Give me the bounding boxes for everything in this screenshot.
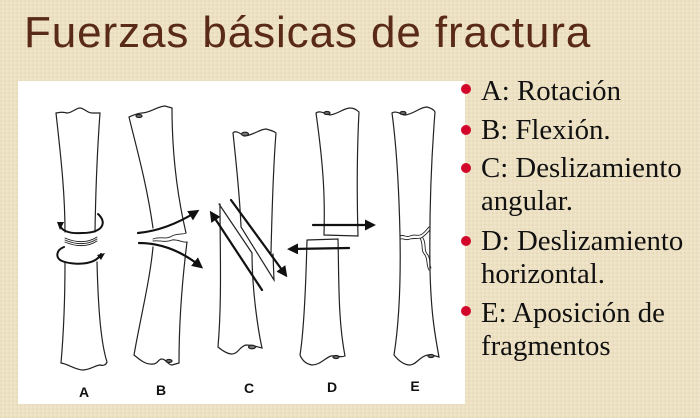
bullet list — [461, 75, 683, 362]
label E: E — [410, 378, 420, 394]
title: Fuerzas básicas de fractura — [24, 8, 591, 57]
text C: C: Deslizamiento — [481, 152, 682, 184]
bullet marker D — [461, 236, 471, 246]
panel: fracture diagram — [18, 81, 465, 404]
bullet marker B — [461, 125, 471, 135]
text D: D: Deslizamiento — [481, 225, 683, 257]
bullet marker C — [461, 163, 471, 173]
bone D: horizontal sliding — [291, 108, 372, 365]
label A: A — [79, 384, 89, 400]
bullet marker A — [461, 84, 471, 94]
label D: D — [327, 379, 337, 395]
text C continued: angular. — [481, 185, 573, 217]
label C: C — [244, 380, 254, 396]
text D continued: horizontal. — [481, 258, 605, 290]
bullet marker E — [461, 306, 471, 316]
text E: E: Aposición de — [481, 297, 665, 329]
bone A: rotation — [56, 108, 107, 370]
label B: B — [156, 382, 166, 398]
text A: A: Rotación — [481, 75, 621, 107]
bone B: flexion — [129, 106, 200, 365]
bone E: fragment apposition — [392, 107, 439, 365]
text E continued: fragmentos — [481, 330, 611, 362]
text B: B: Flexión. — [481, 114, 611, 146]
bone C: angular sliding — [212, 129, 285, 354]
